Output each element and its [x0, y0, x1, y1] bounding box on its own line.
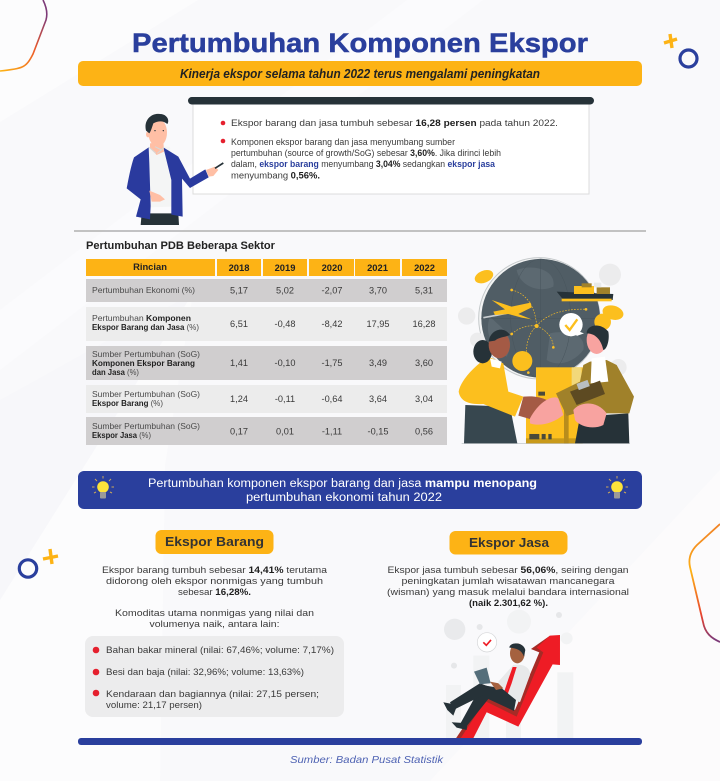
icon: check badge	[477, 633, 497, 652]
table row: komponen ekspor: Ekspor Barang dan Jasa (%)	[92, 323, 199, 332]
table row: SoG barang: 3,04	[415, 394, 433, 404]
table row: SoG jasa: Sumber Pertumbuhan (SoG)	[92, 422, 200, 431]
table heading: Pertumbuhan PDB Beberapa Sektor	[86, 240, 276, 252]
text: ekspor barang: Komoditas utama nonmigas yang nilai dan	[115, 607, 314, 618]
table row: SoG jasa: Ekspor Jasa (%)	[92, 431, 151, 440]
table row: SoG komponen: -0,10	[275, 358, 295, 368]
text: ekspor jasa: Ekspor jasa tumbuh sebesar 56,06% , seiring dengan	[388, 564, 628, 575]
decorative ring left	[19, 560, 37, 577]
text: ekspor barang: sebesar 16,28%.	[178, 586, 251, 597]
table row: komponen ekspor: -0,48	[275, 319, 295, 329]
panel: komoditas list: volume: 21,17 persen)	[106, 699, 202, 710]
table: pertumbuhan PDB	[86, 259, 447, 445]
title: Pertumbuhan Komponen Ekspor	[132, 28, 589, 58]
table row: SoG jasa: -0,15	[368, 426, 388, 436]
table row: pertumbuhan ekonomi: 5,02	[276, 286, 294, 296]
footer bar	[78, 738, 642, 745]
text: ekspor barang: volumenya naik, antara lain:	[150, 618, 280, 629]
table row: komponen ekspor: 17,95	[366, 319, 390, 329]
table row: komponen ekspor: 6,51	[230, 319, 248, 329]
decorative curve right	[689, 524, 720, 642]
icon: red arrow	[456, 635, 560, 738]
decorative ring top-right	[680, 50, 697, 67]
table row: SoG komponen	[86, 346, 447, 380]
illustration: export trade handshake	[458, 258, 634, 444]
panel: key points	[188, 97, 594, 194]
table row: komponen ekspor: -8,42	[322, 319, 342, 329]
text: ekspor barang: didorong oleh ekspor nonmigas yang tumbuh	[106, 575, 323, 586]
panel: komoditas list: Besi dan baja (nilai: 32,96%; volume: 13,63%)	[106, 666, 304, 677]
icon: man with clipboard	[530, 325, 634, 443]
icon: check bubble	[559, 313, 584, 336]
table row: SoG barang: 3,64	[369, 394, 387, 404]
table header: 2020	[322, 262, 342, 273]
heading: ekspor barang: Ekspor Barang	[165, 534, 264, 549]
table row: SoG komponen: 1,41	[230, 358, 248, 368]
table header: 2022	[414, 262, 435, 273]
panel: komoditas list: Bahan bakar mineral (nilai: 67,46%; volume: 7,17%)	[106, 644, 334, 655]
icon: cardboard box	[526, 367, 583, 443]
subtitle banner: Kinerja ekspor selama tahun 2022 terus mengalami peningkatan	[180, 67, 540, 81]
icon: woman	[459, 330, 559, 443]
icon: faded coins	[458, 264, 627, 376]
table row: SoG jasa	[86, 417, 447, 445]
panel: komoditas list: Kendaraan dan bagiannya (nilai: 27,15 persen;	[106, 688, 319, 699]
table row: pertumbuhan ekonomi: 5,31	[415, 286, 433, 296]
table row: SoG barang: Sumber Pertumbuhan (SoG)	[92, 390, 200, 399]
panel: key points: dalam, ekspor barang menyumbang 3,04% sedangkan ekspor jasa	[231, 158, 496, 169]
table row: SoG jasa: 0,56	[415, 426, 433, 436]
icon: light bulb left	[92, 476, 114, 498]
icon: plane	[483, 300, 532, 319]
table row: pertumbuhan ekonomi: -2,07	[322, 286, 342, 296]
table row: SoG barang	[86, 385, 447, 413]
text: ekspor jasa: (wisman) yang masuk melalui bandara internasional	[387, 586, 629, 597]
table row: SoG komponen: Sumber Pertumbuhan (SoG)	[92, 350, 200, 359]
table header: 2018	[229, 262, 249, 273]
panel: komoditas list	[85, 636, 344, 717]
text: ekspor jasa: peningkatan jumlah wisatawan mancanegara	[402, 575, 615, 586]
heading: ekspor jasa	[450, 531, 568, 554]
table row: pertumbuhan ekonomi: 5,17	[230, 286, 248, 296]
icon: seated man with laptop	[443, 643, 530, 730]
banner: key message	[78, 471, 642, 509]
banner: key message: Pertumbuhan komponen ekspor barang dan jasa mampu menopang	[148, 478, 537, 490]
table row: SoG komponen: 3,60	[415, 358, 433, 368]
table row: SoG barang: Ekspor Barang (%)	[92, 399, 163, 408]
divider	[74, 230, 646, 232]
icon: ship	[557, 283, 613, 301]
table row: komponen ekspor: Pertumbuhan Komponen	[92, 314, 191, 323]
icon: presenter man	[127, 114, 223, 225]
text: ekspor barang: Ekspor barang tumbuh sebesar 14,41% terutama	[102, 564, 328, 575]
decorative curve top-left	[0, 0, 47, 71]
table header: Rincian	[133, 261, 167, 272]
heading: ekspor barang	[156, 530, 274, 554]
table row: SoG komponen: -1,75	[322, 358, 342, 368]
source note: Sumber: Badan Pusat Statistik	[290, 754, 444, 766]
table row: SoG komponen: 3,49	[369, 358, 387, 368]
heading: ekspor jasa: Ekspor Jasa	[469, 535, 550, 550]
subtitle banner	[78, 61, 642, 86]
faded background shapes	[444, 610, 573, 738]
table row: pertumbuhan ekonomi: 3,70	[369, 286, 387, 296]
table row: SoG jasa: 0,01	[276, 426, 294, 436]
decorative plus top-right	[664, 34, 677, 48]
icon: globe	[479, 258, 600, 379]
decorative plus left	[43, 549, 58, 564]
table row: SoG komponen: dan Jasa (%)	[92, 368, 139, 377]
icon: coins	[473, 267, 625, 371]
text: ekspor barang	[102, 564, 328, 629]
text: ekspor jasa	[387, 564, 629, 608]
illustration: man on rising arrow	[443, 610, 573, 738]
table header: 2019	[275, 262, 295, 273]
table row: SoG barang: -0,11	[275, 394, 295, 404]
table header: 2021	[367, 262, 388, 273]
table row: SoG jasa: -1,11	[322, 426, 342, 436]
panel: key points: Ekspor barang dan jasa tumbuh sebesar 16,28 persen pada tahun 2022.	[231, 117, 558, 128]
table row: SoG barang: 1,24	[230, 394, 248, 404]
table row: SoG barang: -0,64	[322, 394, 342, 404]
table row: SoG komponen: Komponen Ekspor Barang	[92, 359, 195, 368]
panel: key points: menyumbang 0,56%.	[231, 170, 320, 180]
banner: key message: pertumbuhan ekonomi tahun 2022	[246, 492, 442, 504]
table header	[86, 259, 447, 276]
table row: komponen ekspor: 16,28	[412, 319, 436, 329]
table row: pertumbuhan ekonomi	[86, 279, 447, 302]
text: ekspor jasa: (naik 2.301,62 %).	[469, 597, 548, 608]
panel: key points: Komponen ekspor barang dan jasa menyumbang sumber	[231, 136, 455, 147]
table row: komponen ekspor	[86, 307, 447, 341]
panel: key points: pertumbuhan (source of growth/SoG) sebesar 3,60%. Jika dirinci lebih	[231, 147, 501, 158]
table row: pertumbuhan ekonomi: Pertumbuhan Ekonomi (%)	[92, 286, 195, 295]
icon: light bulb right	[606, 476, 628, 498]
table row: SoG jasa: 0,17	[230, 426, 248, 436]
